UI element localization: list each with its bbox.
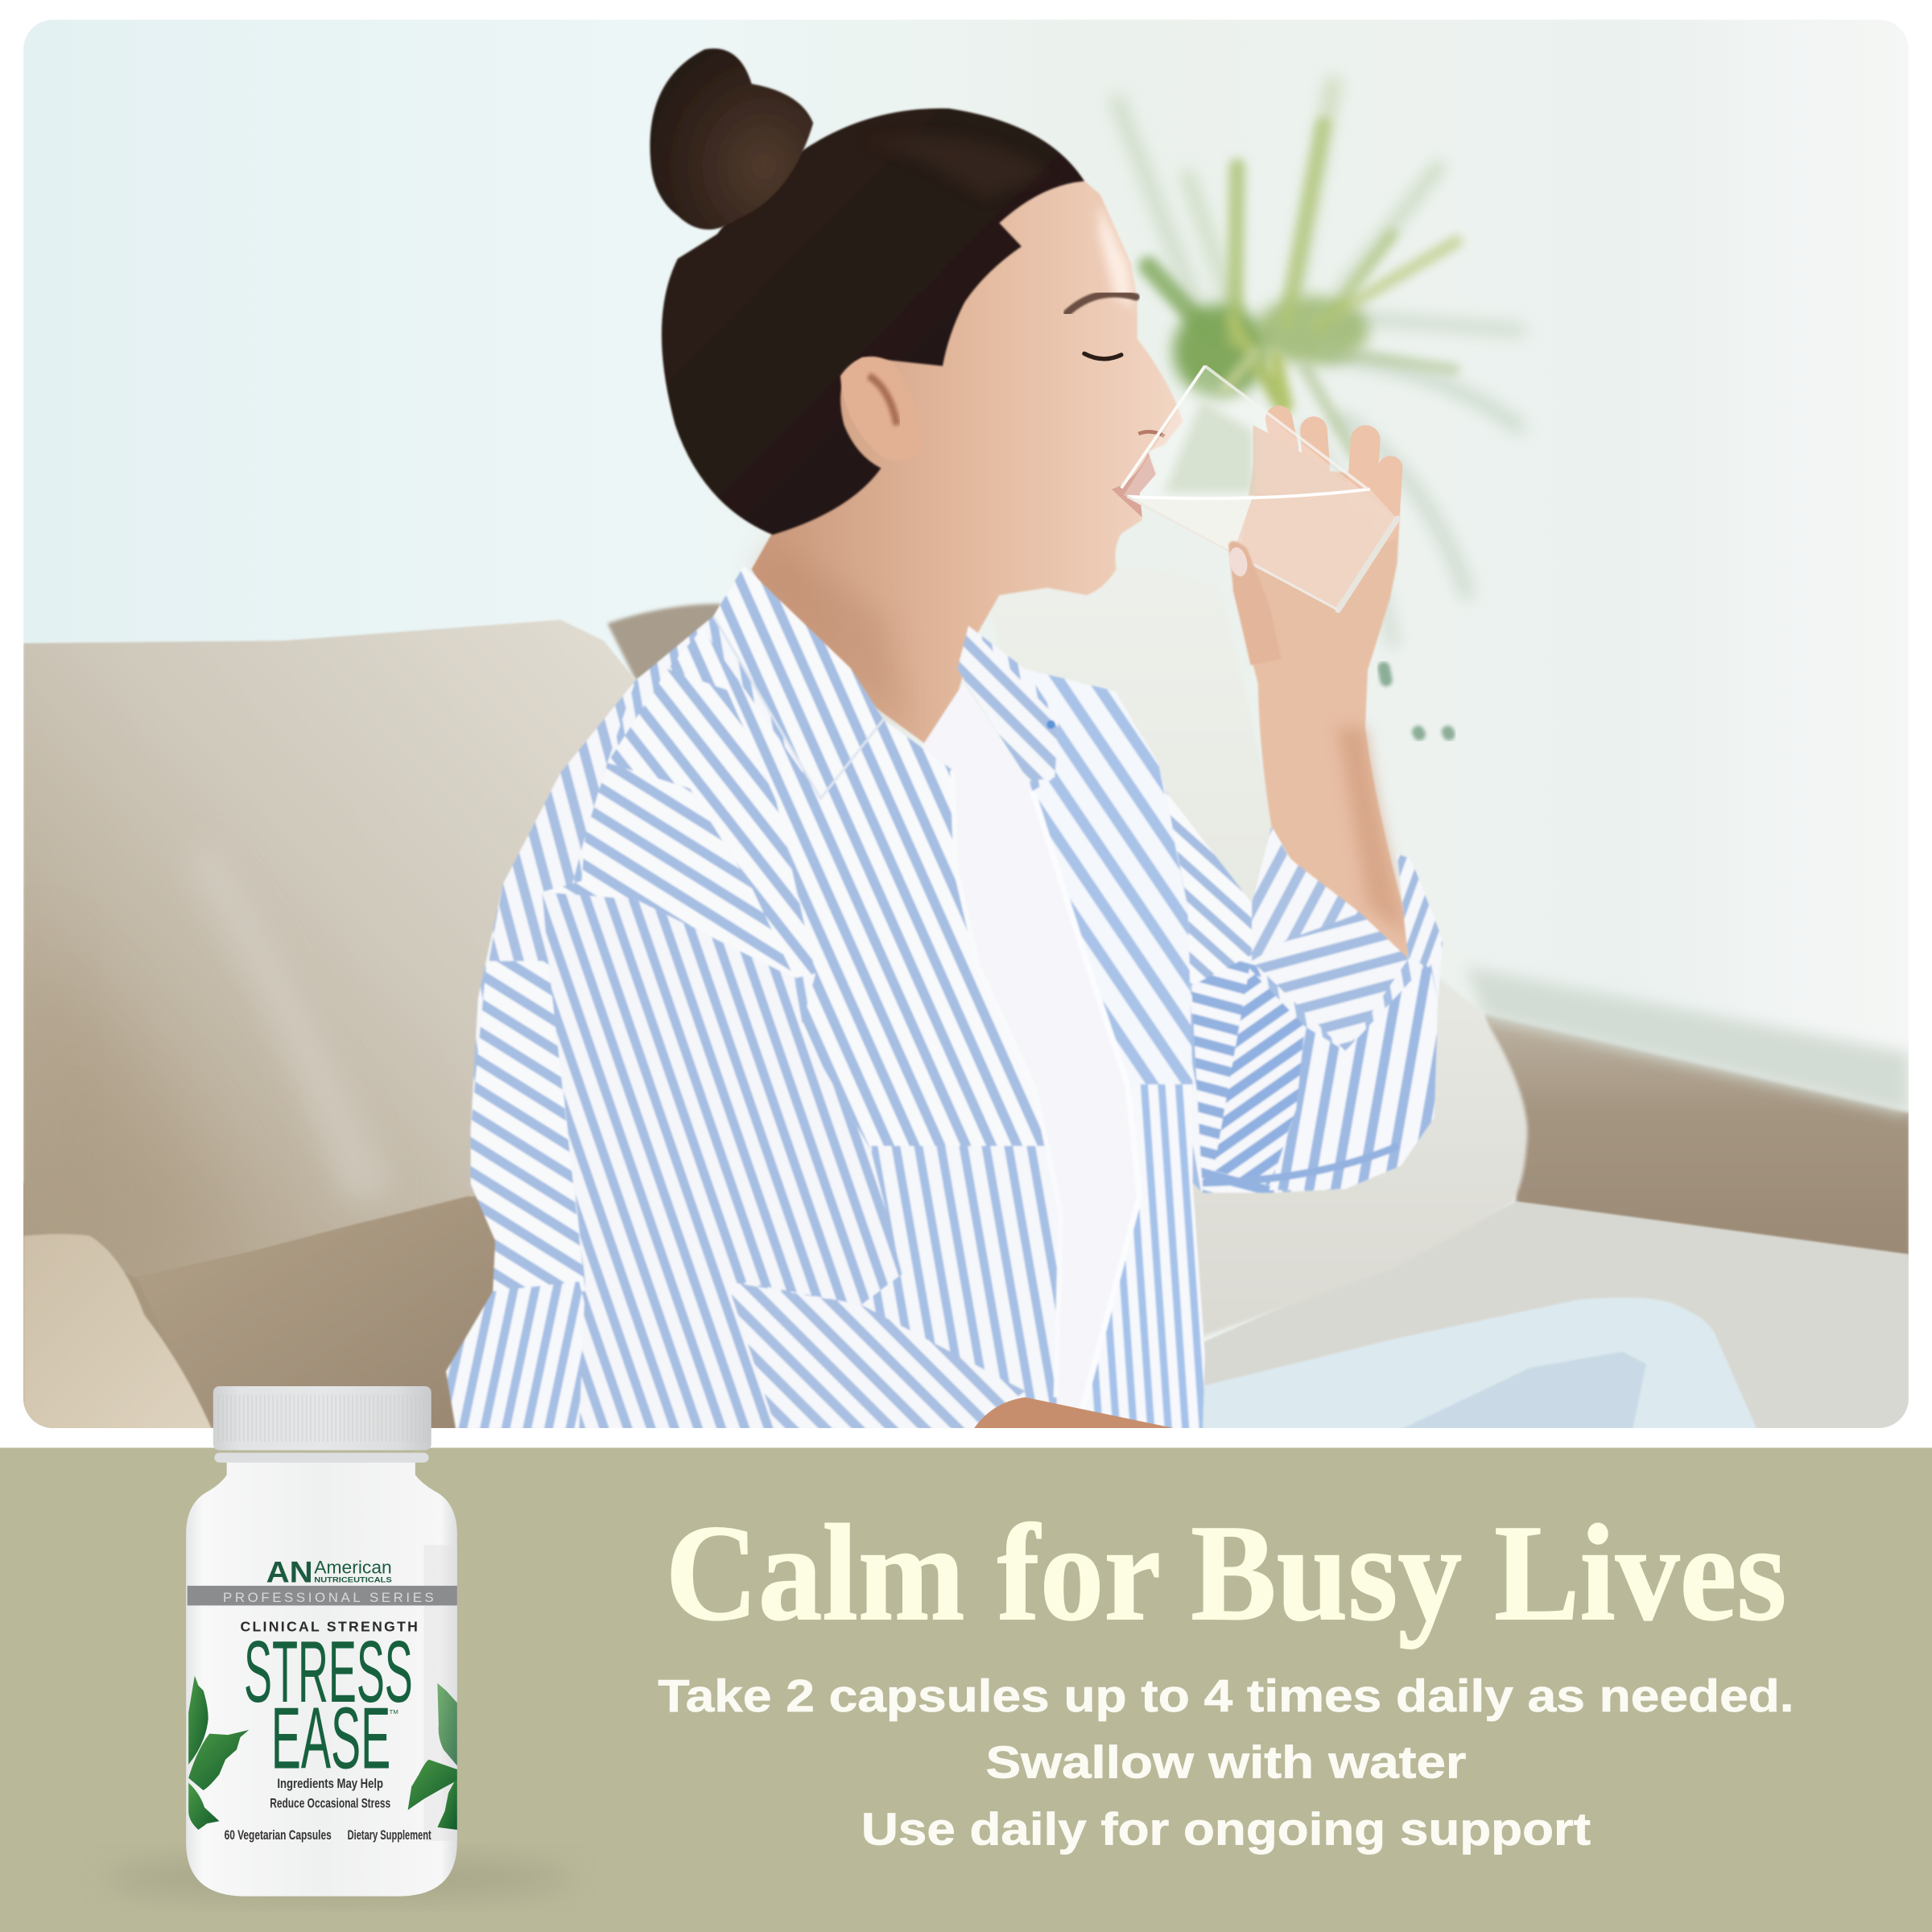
nostril: [1138, 431, 1164, 436]
green footer band: [0, 1447, 1932, 1932]
professional series stripe: [188, 1586, 457, 1605]
claim line one: Ingredients May Help: [277, 1776, 383, 1791]
glass upper edge: [1205, 366, 1368, 489]
bottle cap: [213, 1386, 431, 1451]
placket edge: [952, 770, 1061, 1397]
bottle body: [186, 1461, 457, 1897]
headline: Calm for Busy Lives: [666, 1496, 1786, 1649]
brand subtitle: NUTRICEUTICALS: [314, 1575, 392, 1583]
finger two: [1299, 415, 1331, 481]
thumb nail: [1227, 546, 1250, 578]
hand seen through glass: [1253, 425, 1361, 493]
sleeve curved bottom stripe: [1203, 1146, 1398, 1183]
direction line two: Swallow with water: [985, 1738, 1466, 1789]
finger three: [1346, 424, 1381, 512]
brand logo mark: AN: [266, 1555, 313, 1588]
cap ribs: [216, 1395, 429, 1442]
water over hand: [1232, 489, 1397, 610]
green refraction in glass: [1164, 400, 1253, 493]
glass base edge: [1338, 518, 1397, 610]
sofa back right: [1193, 765, 1530, 1336]
upper right sleeve: [1166, 791, 1252, 1022]
crown highlight: [862, 137, 1047, 197]
right cuff flap: [1397, 854, 1443, 968]
glass rim: [1121, 366, 1205, 488]
collar right: [957, 626, 1059, 781]
sleeve body vertical stripes: [1269, 961, 1438, 1191]
clear water left: [1128, 495, 1253, 555]
back panel lower: [446, 1282, 616, 1430]
finger one: [1263, 403, 1301, 464]
hair: [662, 109, 1084, 535]
right leaves: [408, 1683, 457, 1830]
left leaves: [188, 1676, 249, 1830]
cushion dark lower shading: [23, 965, 192, 1217]
hand on lap: [973, 1397, 1179, 1430]
fingers: [1263, 403, 1403, 543]
dark plant centre: [1173, 304, 1266, 398]
collar fold shadow: [713, 616, 883, 799]
sofa arm top haze: [1466, 968, 1909, 1115]
cuff fold: [1252, 913, 1408, 1051]
pale outer fronds: [1117, 84, 1518, 641]
direction line one: Take 2 capsules up to 4 times daily as needed.: [658, 1671, 1794, 1722]
brown seat cushion: [345, 1223, 483, 1428]
clinical strength label: CLINICAL STRENGTH: [240, 1619, 418, 1635]
cushion light fold: [204, 866, 386, 1201]
leaf middle right: [408, 1760, 457, 1810]
forearm and palm: [1233, 469, 1411, 973]
dark rear cushion: [608, 604, 720, 680]
plant crown: [1256, 295, 1369, 365]
shoulder wedge mid: [608, 669, 815, 978]
sofa base left: [23, 1183, 478, 1428]
upper cuff: [1252, 827, 1360, 961]
mid right sleeve: [1191, 955, 1282, 1193]
white t-shirt: [918, 683, 1152, 1430]
right front panel upper: [1025, 669, 1193, 1084]
neck and face skin: [752, 148, 1183, 743]
capsule count: 60 Vegetarian Capsules: [225, 1827, 332, 1843]
glass body: [1124, 366, 1397, 610]
bottle ground shadow: [105, 1857, 573, 1899]
claim line two: Reduce Occasional Stress: [270, 1795, 390, 1810]
closed eye lashes: [1084, 353, 1121, 359]
collar button: [1046, 720, 1055, 729]
bunched sleeve folds: [1214, 968, 1305, 1185]
supplement label: Dietary Supplement: [348, 1827, 431, 1843]
shoulder wedge low: [542, 762, 795, 978]
right front panel lower: [1082, 1084, 1205, 1430]
ear: [840, 357, 924, 460]
sofa seat right: [1201, 1201, 1909, 1430]
label sheen right: [424, 1545, 457, 1841]
trademark: TM: [390, 1708, 398, 1715]
forehead highlight: [1099, 204, 1133, 308]
large left cushion: [23, 620, 636, 1278]
leaf lower: [188, 1783, 219, 1830]
glass lower edge: [1128, 497, 1338, 610]
leaf upper right: [437, 1683, 457, 1765]
wall background: [23, 19, 1909, 1428]
leaf dots near wall: [1384, 668, 1449, 734]
chest lower: [861, 1146, 1061, 1397]
water surface: [1128, 489, 1370, 498]
brand name: American: [314, 1558, 392, 1578]
shirt: [446, 566, 1443, 1430]
leaf upper: [188, 1676, 208, 1765]
direction line three: Use daily for ongoing support: [861, 1804, 1591, 1855]
eyebrow: [1067, 294, 1136, 313]
thumb: [1228, 541, 1282, 666]
chest upper: [668, 629, 1047, 1151]
product bottle: [186, 1386, 457, 1897]
drinking glass: [1121, 366, 1397, 610]
right inner edge: [1033, 791, 1140, 1411]
leaf middle: [188, 1730, 249, 1790]
jeans pocket: [1401, 1352, 1646, 1430]
inner ear shadow: [869, 376, 897, 425]
hair bun: [650, 48, 813, 229]
leaf lower right: [437, 1777, 457, 1830]
back panel middle: [471, 961, 585, 1291]
main sleeve: [542, 892, 902, 1430]
sleeve hem: [727, 1282, 1025, 1430]
collar left: [713, 566, 883, 799]
front left pillow: [23, 1234, 212, 1430]
lips: [1112, 453, 1156, 518]
woman figure: [446, 48, 1757, 1430]
professional series label: PROFESSIONAL SERIES: [223, 1590, 434, 1605]
bright mid fronds: [1149, 125, 1456, 456]
photo panel: woman drinking water on sofa: [23, 19, 1909, 1430]
product name line two: EASE: [271, 1690, 390, 1787]
finger four: [1373, 455, 1403, 543]
back panel upper: [487, 680, 636, 973]
blurred green plant: [1117, 84, 1518, 734]
bottle collar: [214, 1453, 429, 1463]
shirt base silhouette: [446, 566, 1443, 1430]
sofa arm right: [1484, 1014, 1909, 1259]
directions text block: [658, 1671, 1794, 1855]
forearm shading: [1337, 727, 1407, 936]
jeans: [1177, 1298, 1757, 1430]
neck shadow: [758, 542, 912, 733]
product bottle: STRESS: [244, 1624, 413, 1721]
